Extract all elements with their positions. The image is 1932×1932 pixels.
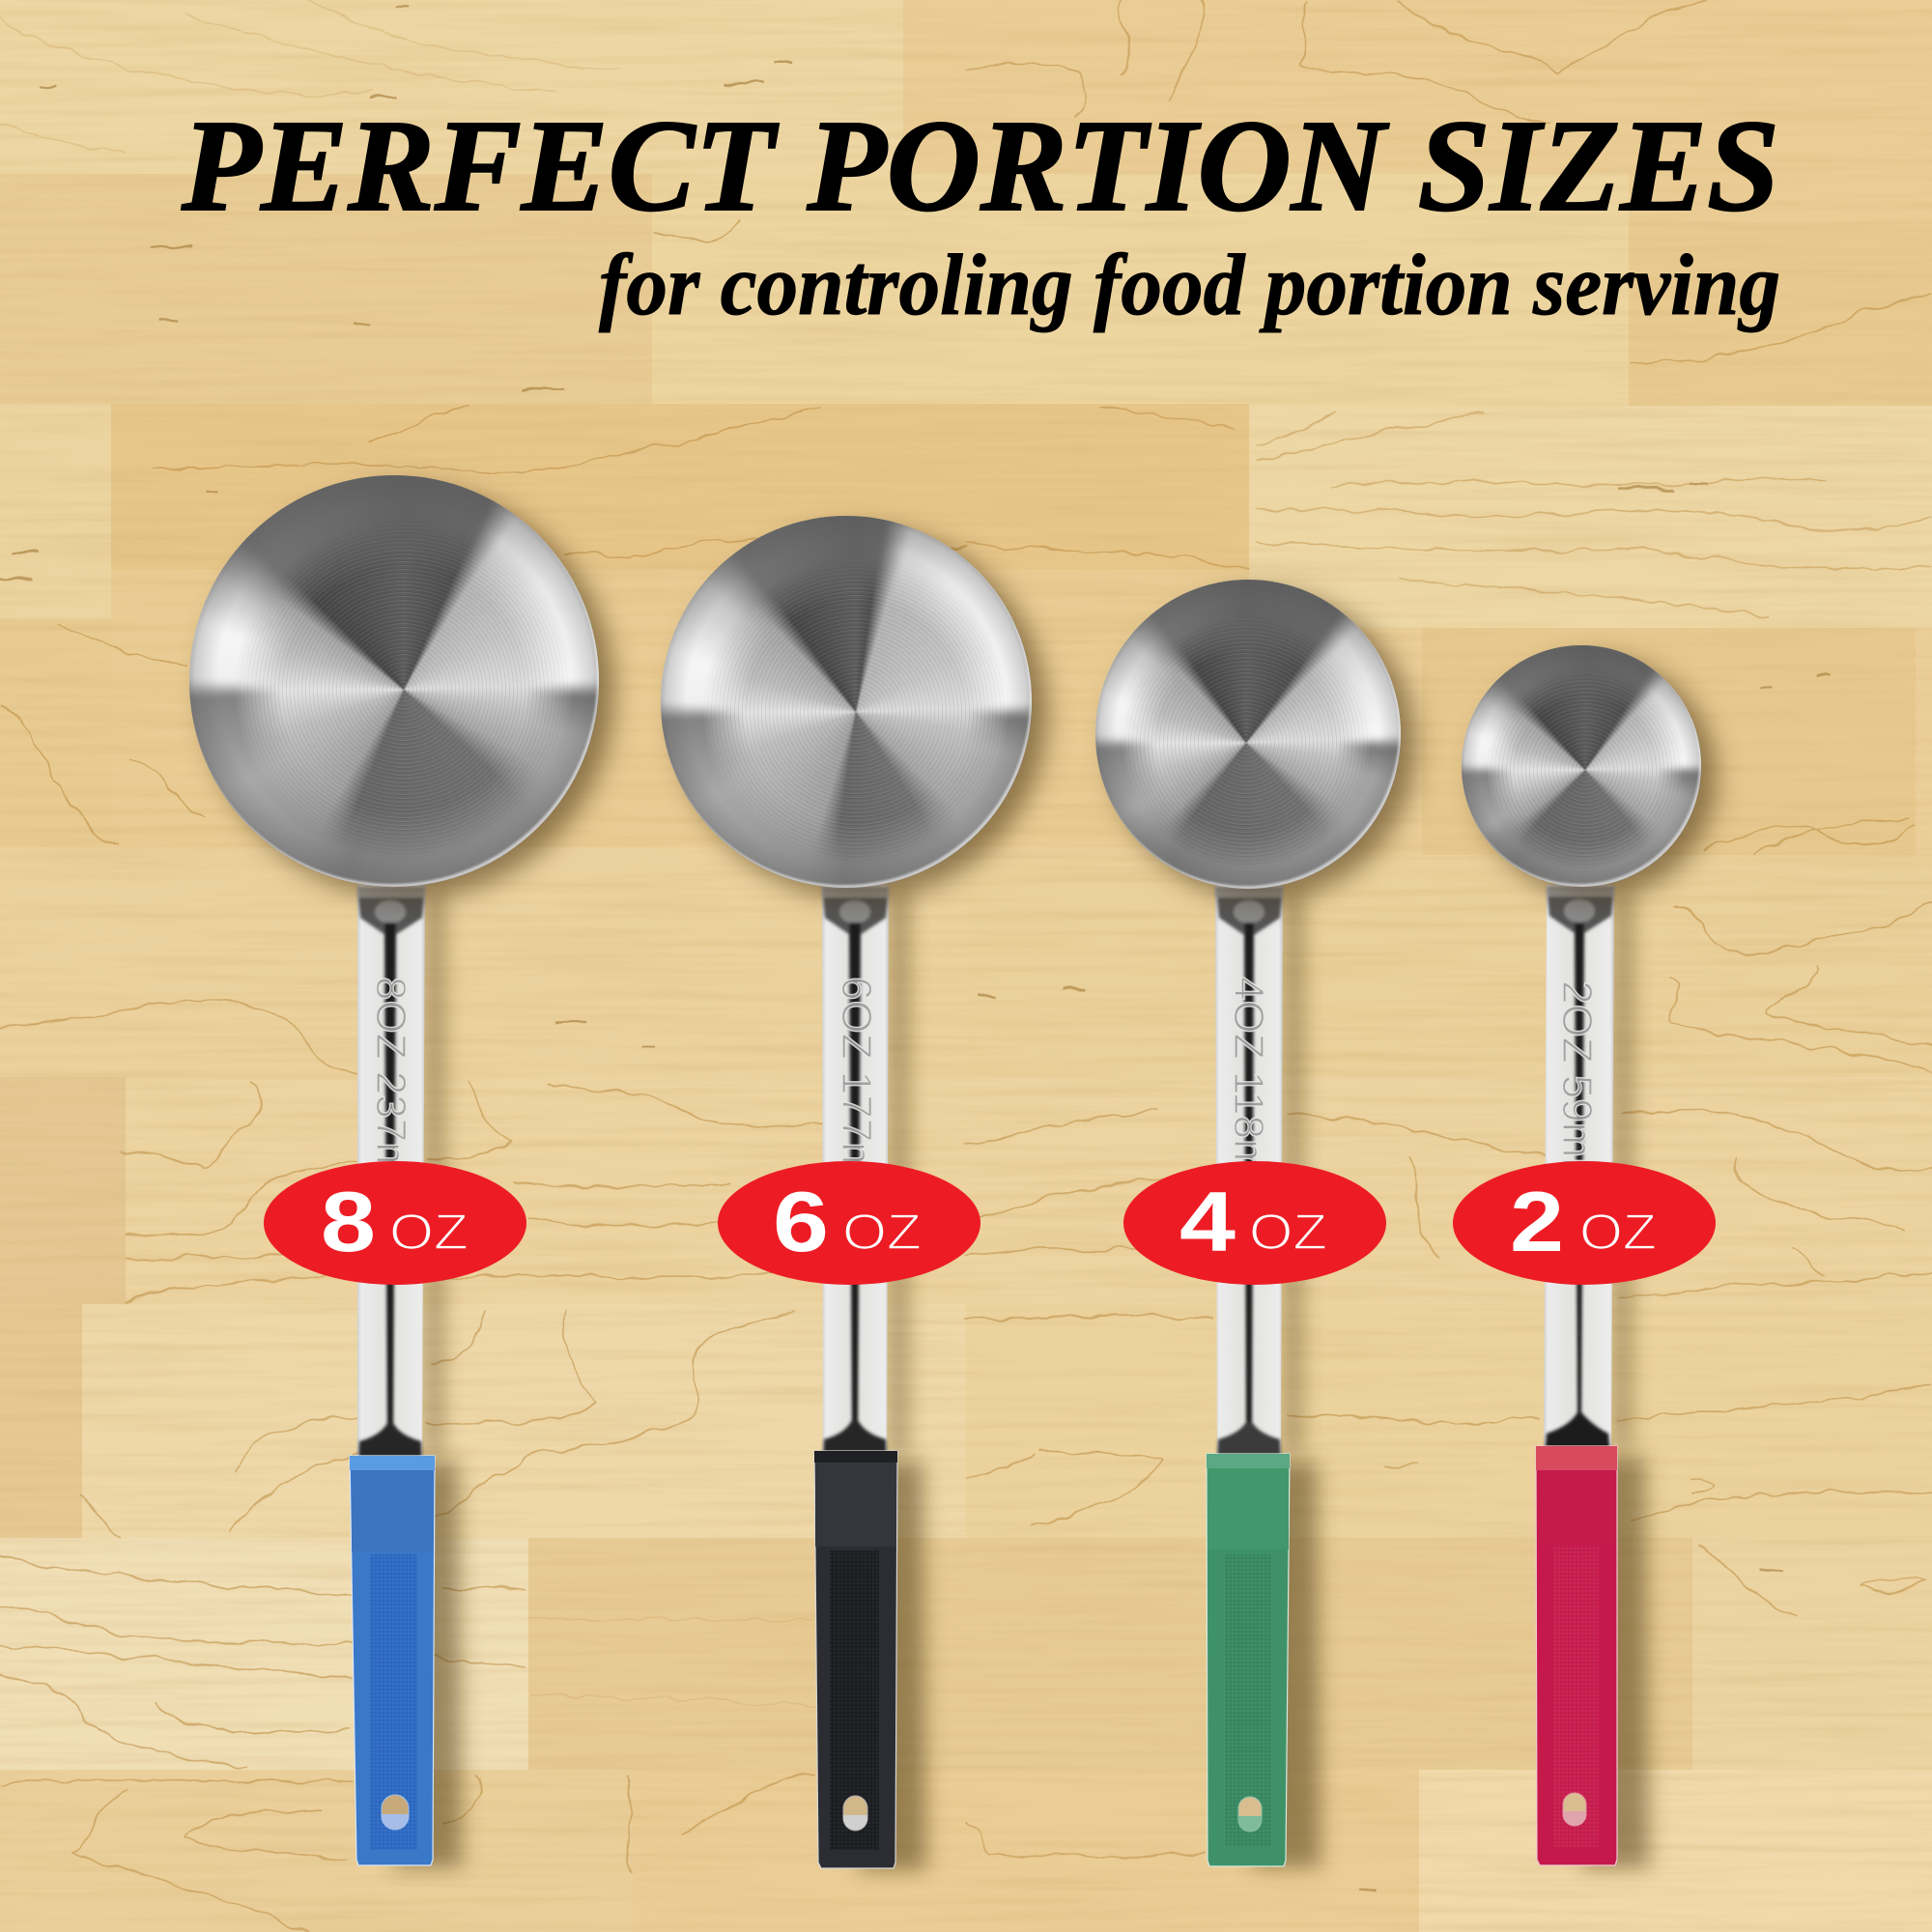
size badge: 2 oz bbox=[1453, 1161, 1716, 1285]
handle: blue grip bbox=[349, 885, 475, 1882]
size badge: 2 oz: OZ bbox=[1579, 1205, 1657, 1261]
size badge: 6 oz: OZ bbox=[842, 1205, 922, 1261]
size badge: 8 oz: OZ bbox=[389, 1205, 469, 1261]
handle: red grip: 2OZ 59ml bbox=[1553, 980, 1601, 1167]
size badge: 8 oz: 8 bbox=[321, 1174, 376, 1269]
handle: green grip: 4OZ 118ml bbox=[1225, 977, 1272, 1183]
spoon: 6 oz bbox=[661, 512, 1063, 1884]
size badge: 6 oz bbox=[718, 1161, 980, 1285]
bowl: 4 oz bbox=[1095, 580, 1401, 889]
spoon: 2 oz bbox=[1453, 641, 1733, 1882]
bowl: 2 oz bbox=[1462, 645, 1701, 887]
handle: red grip bbox=[1535, 884, 1662, 1882]
size badge: 4 oz bbox=[1123, 1161, 1386, 1285]
spoon: 8 oz bbox=[189, 471, 630, 1882]
handle: blue grip: 8OZ 237ml bbox=[367, 977, 414, 1187]
size badge: 4 oz: 4 bbox=[1179, 1174, 1236, 1269]
size badge: 8 oz bbox=[264, 1161, 526, 1285]
spoon: 4 oz bbox=[1095, 575, 1432, 1882]
size badge: 6 oz: 6 bbox=[773, 1174, 829, 1269]
handle: green grip bbox=[1206, 885, 1334, 1882]
handle: black grip: 6OZ 177ml bbox=[833, 977, 880, 1187]
title bbox=[180, 94, 1780, 333]
subheading: for controling food portion serving bbox=[599, 238, 1780, 333]
bowl: 8 oz bbox=[189, 475, 599, 887]
heading: perfect portion sizes: PERFECT PORTION SIZES bbox=[181, 94, 1779, 239]
size badge: 2 oz: 2 bbox=[1510, 1174, 1564, 1269]
size badge: 4 oz: OZ bbox=[1249, 1205, 1327, 1261]
bowl: 6 oz bbox=[661, 516, 1032, 888]
handle: black grip bbox=[813, 885, 940, 1884]
